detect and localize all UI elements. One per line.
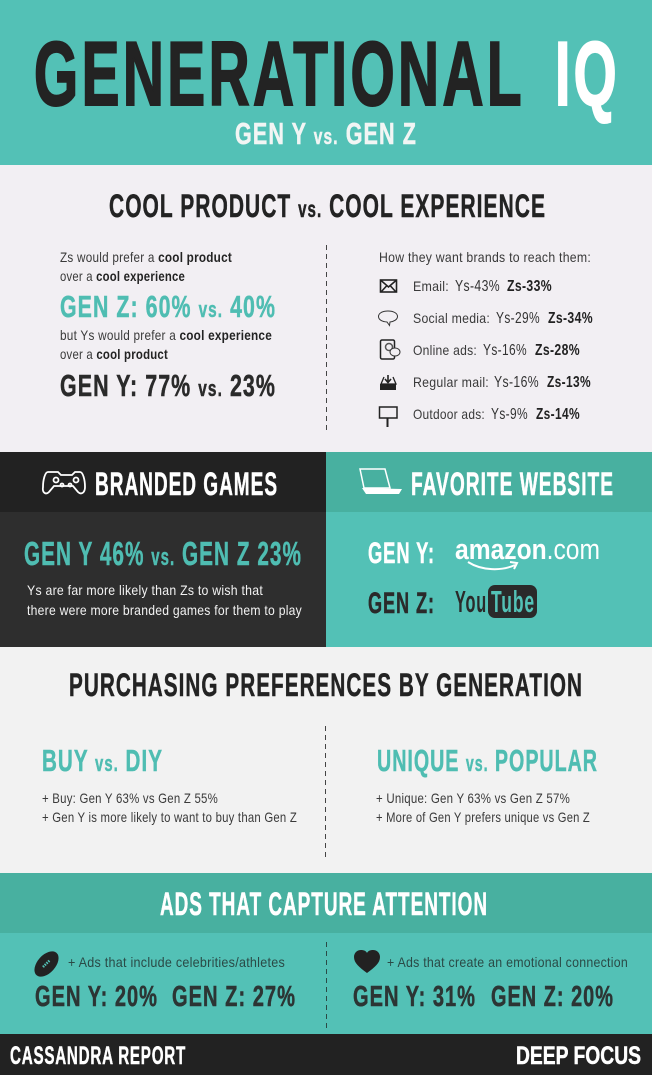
block: buy vs DIY: + Gen Y is more likely to want to buy than Gen Z [42,809,297,825]
heading: BRANDED GAMES [95,466,278,502]
statistic: GEN Y 46% vs. GEN Z 23% [24,535,302,572]
icon: tablet with hand [380,340,400,359]
row: online ads [380,340,580,359]
row: regular mail: Zs-13% [547,374,591,391]
text block: Gen Y preference [60,327,276,403]
row: Gen Z YouTube [368,584,537,620]
row: online ads: Online ads: [413,342,477,358]
block: unique vs popular [376,743,598,825]
text block: Gen Z preference: over a cool experience [60,268,185,284]
text block: Gen Z preference: Zs would prefer a cool product [60,249,232,265]
row: online ads: Ys-16% [483,342,527,359]
row: email [380,278,552,295]
logo: YouTube: You [455,584,487,619]
text block: brand reach list [378,249,593,427]
panel: favorite website [326,452,652,647]
text block: Gen Z preference: GEN Z: 60% vs. 40% [60,289,276,324]
text block: Gen Y preference: over a cool product [60,346,168,362]
row: outdoor ads [380,406,580,427]
row: online ads: Zs-28% [535,342,580,359]
panel: cool product vs cool experience [0,165,652,452]
panel: purchasing preferences [0,647,652,873]
block: emotional connection: GEN Y: 31% [353,981,476,1013]
icon: inbox tray [380,375,396,390]
text block: Gen Z preference [60,249,276,324]
row: outdoor ads: Ys-9% [491,406,528,423]
panel: ads that capture attention [0,873,652,1034]
row: email: Zs-33% [507,278,552,295]
row: social media: Zs-34% [548,310,593,327]
icon: billboard [380,407,397,427]
logo: amazon: amazon.com [455,534,600,566]
block: buy vs DIY [42,743,297,825]
logo: Cassandra Report: CASSANDRA REPORT [10,1042,186,1070]
text block [27,582,302,618]
row: outdoor ads: Outdoor ads: [413,406,485,422]
row: email: Email: [413,278,449,294]
icon: speech bubble [378,311,398,326]
block: celebrities: GEN Y: 20% [35,981,158,1013]
row: regular mail: Ys-16% [494,374,539,391]
icon: football [30,947,63,981]
block: celebrities: GEN Z: 27% [172,981,296,1013]
block: emotional connection [353,950,628,1013]
panel: branded games [0,452,326,647]
block: celebrities [30,947,296,1013]
row: email: Ys-43% [455,278,500,295]
text block: brand reach list: How they want brands to reach them: [379,249,591,265]
block: emotional connection: + Ads that create an emotional connection [387,954,628,970]
icon: heart [354,950,380,973]
block: unique vs popular: + Unique: Gen Y 63% vs Gen Z 57% [376,790,570,806]
text block: Ys are far more likely than Zs to wish that [27,582,263,598]
block: buy vs DIY: BUY vs. DIY [42,743,163,778]
text block: Gen Y preference: GEN Y: 77% vs. 23% [60,368,276,403]
row: social media [378,310,593,327]
text block: Gen Y preference: but Ys would prefer a cool experience [60,327,272,343]
block: unique vs popular: + More of Gen Y prefers unique vs Gen Z [376,809,590,825]
row: regular mail [380,374,591,391]
row: Gen Y amazon [368,534,600,570]
logo: YouTube: Tube [491,584,535,619]
text block: there were more branded games for them to play [27,602,302,618]
row: social media: Social media: [413,310,490,326]
row: outdoor ads: Zs-14% [536,406,580,423]
row: regular mail: Regular mail: [413,374,489,390]
subtitle: GEN Y vs. GEN Z [235,116,417,151]
heading: COOL PRODUCT vs. COOL EXPERIENCE [109,188,546,224]
row: Gen Z YouTube: GEN Z: [368,587,435,620]
panel: header [0,0,652,165]
block: buy vs DIY: + Buy: Gen Y 63% vs Gen Z 55% [42,790,218,806]
icon: envelope [380,280,396,292]
icon: game controller [43,472,85,493]
row: Gen Y amazon: GEN Y: [368,537,435,570]
footer [0,1034,652,1075]
icon: laptop [360,469,402,494]
row: social media: Ys-29% [496,310,540,327]
block: celebrities: + Ads that include celebrities/athletes [68,954,285,970]
